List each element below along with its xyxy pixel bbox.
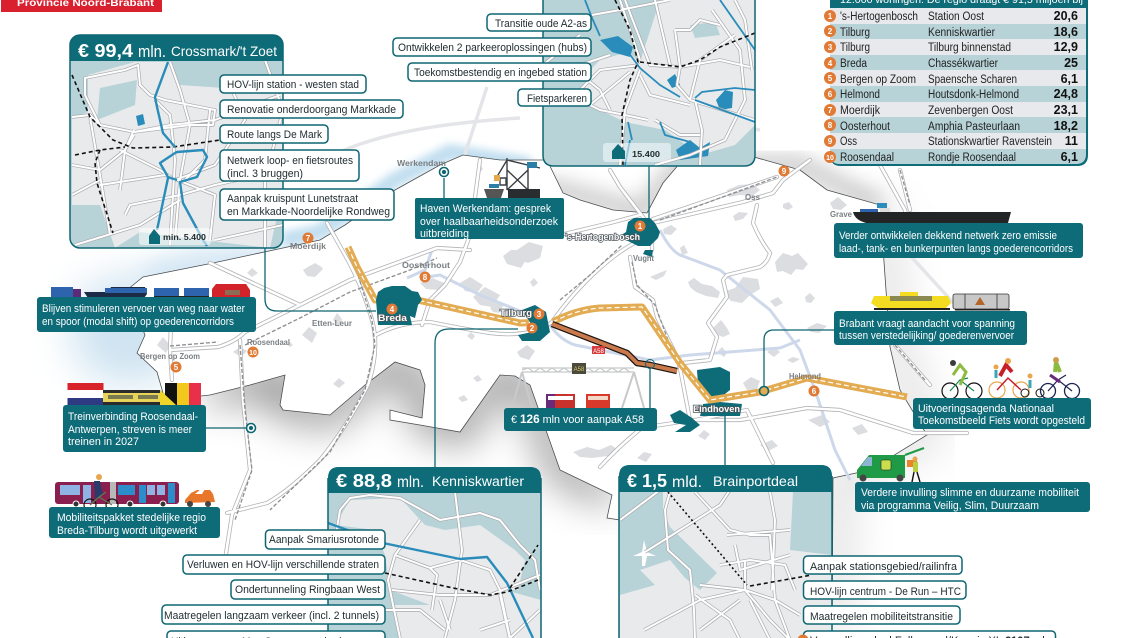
table: station investments: 12,9 bbox=[1054, 40, 1078, 54]
table: station investments: 1 bbox=[828, 12, 833, 21]
labels: Brainportdeal measures: Aanpak stationsgebied/railinfra bbox=[810, 561, 958, 573]
icon: locomotive and wagon bbox=[871, 292, 1010, 310]
callout: modal shift bbox=[37, 297, 256, 332]
callout: Mobiliteitspakket: Breda-Tilburg wordt uitgewerkt bbox=[57, 525, 197, 537]
place labels and numbered markers: Grave bbox=[830, 210, 853, 219]
place labels and numbered markers: Tilburg bbox=[500, 308, 532, 318]
place labels and numbered markers: Etten-Leur bbox=[312, 319, 352, 328]
labels: station measures bbox=[393, 14, 591, 106]
labels: Kenniskwartier measures: Aanpak Smariusrotonde bbox=[269, 534, 379, 546]
icon: house bbox=[149, 229, 160, 244]
table: station investments: 's-Hertogenbosch bbox=[840, 11, 918, 23]
callout: Haven Werkendam: Haven Werkendam: gesprek bbox=[420, 203, 551, 215]
place labels and numbered markers: Vught bbox=[633, 254, 654, 263]
table: station investments: Rondje Roosendaal bbox=[928, 152, 1016, 164]
table: station investments: Oss bbox=[840, 136, 857, 148]
place labels and numbered markers: 3 bbox=[537, 310, 542, 319]
table: station investments: Amphia Pasteurlaan bbox=[928, 121, 1020, 133]
place labels and numbered markers: 10 bbox=[249, 350, 257, 357]
panel header bbox=[328, 467, 541, 493]
panel: Crossmark 't Zoet bbox=[70, 35, 283, 248]
labels: Crossmark measures bbox=[220, 75, 403, 220]
panel: Brainportdeal: € 1,5 bbox=[627, 471, 667, 491]
place labels and numbered markers: 9 bbox=[782, 167, 787, 176]
table: station investments: 8 bbox=[828, 121, 833, 130]
labels: Crossmark measures: Renovatie onderdoorgang Markkade bbox=[227, 104, 396, 116]
callout: verstedelijking: Brabant vraagt aandacht voor spanning bbox=[839, 318, 1015, 330]
place labels and numbered markers: Bergen op Zoom bbox=[140, 352, 200, 361]
icon: house bbox=[612, 144, 625, 159]
panel: Crossmark 't Zoet: mln. bbox=[138, 42, 166, 61]
labels: Kenniskwartier measures: Maatregelen langzaam verkeer (incl. 2 tunnels) bbox=[164, 610, 379, 622]
map: towns bbox=[157, 163, 868, 462]
callout: Mobiliteitspakket bbox=[49, 507, 220, 538]
callout: zero emissie bbox=[834, 223, 1083, 258]
place labels and numbered markers: Oss bbox=[745, 193, 761, 202]
panel: Crossmark 't Zoet: min. 5.400 bbox=[163, 233, 207, 242]
table: station investments: 24,8 bbox=[1054, 87, 1078, 101]
labels: Kenniskwartier measures bbox=[162, 530, 385, 638]
table: station investments: 6,1 bbox=[1061, 150, 1078, 164]
table: station investments: Tilburg bbox=[840, 42, 870, 54]
place labels and numbered markers: Eindhoven bbox=[693, 404, 740, 414]
panel: Kenniskwartier bbox=[328, 467, 541, 638]
panel header bbox=[70, 35, 283, 61]
table: station investments: Stationskwartier Ravenstein bbox=[928, 136, 1052, 148]
table: station investments bbox=[824, 0, 1088, 166]
place labels and numbered markers bbox=[140, 159, 853, 414]
table: station investments: 10 bbox=[826, 155, 834, 162]
labels: station measures: Ontwikkelen 2 parkeeroplossingen (hubs) bbox=[398, 42, 587, 54]
table: station investments: 11 bbox=[1065, 134, 1078, 148]
labels: Crossmark measures: Route langs De Mark bbox=[227, 129, 322, 141]
table: station investments: Houtsdonk-Helmond bbox=[928, 89, 1019, 101]
table: station investments: 9 bbox=[828, 137, 833, 146]
icon: flags and train bbox=[68, 383, 201, 406]
place labels and numbered markers: 4 bbox=[390, 305, 395, 314]
callout: Haven Werkendam: over haalbaarheidsonderzoek bbox=[420, 216, 558, 228]
callout: modal shift: Blijven stimuleren vervoer van weg naar water bbox=[42, 303, 245, 315]
table: station investments: Helmond bbox=[840, 89, 880, 101]
icons: truck, barge, freight train bbox=[51, 284, 250, 298]
callout: zero emissie: Verder ontwikkelen dekkend netwerk zero emissie bbox=[839, 230, 1057, 242]
panel: Kenniskwartier: € 88,8 bbox=[336, 471, 392, 491]
icon: green van bbox=[857, 448, 924, 482]
labels: Crossmark measures: Aanpak kruispunt Lunetstraat bbox=[227, 193, 358, 205]
map: teal city shapes bbox=[376, 218, 742, 432]
panel: Brainportdeal: mld. bbox=[672, 474, 702, 491]
panel: 's-Hertogenbosch station map bbox=[543, 0, 755, 166]
labels: Kenniskwartier measures: Ondertunneling Ringbaan West bbox=[235, 584, 380, 596]
table: station investments: 20,6 bbox=[1054, 9, 1078, 23]
callout: zero emissie: laad-, tank- en bunkerpunten langs goederencorridors bbox=[839, 243, 1073, 255]
panel: Crossmark 't Zoet: Crossmark/'t Zoet bbox=[171, 43, 277, 59]
place labels and numbered markers: 2 bbox=[530, 324, 535, 333]
table: station investments: 2 bbox=[828, 27, 833, 36]
callout: Roosendaal-Antwerpen train: Treinverbinding Roosendaal- bbox=[68, 411, 198, 423]
table: station investments: 7 bbox=[828, 106, 833, 115]
panel: Brainportdeal bbox=[619, 465, 832, 638]
place labels and numbered markers: 7 bbox=[306, 234, 311, 243]
table: station investments: 18,6 bbox=[1054, 25, 1078, 39]
map: province shape bbox=[127, 155, 927, 638]
place labels and numbered markers: Oosterhout bbox=[402, 261, 450, 270]
callout: verstedelijking: tussen verstedelijking/ goederenvervoer bbox=[839, 330, 1014, 342]
place labels and numbered markers: 6 bbox=[812, 387, 817, 396]
callout: Nationaal Toekomstbeeld Fiets: Toekomstbeeld Fiets wordt opgesteld bbox=[918, 415, 1085, 427]
map label: red province tag bbox=[1, 0, 162, 12]
table: station investments: 5 bbox=[828, 74, 833, 83]
callout: Mobiliteitspakket: Mobiliteitspakket stedelijke regio bbox=[57, 512, 206, 524]
labels: Crossmark measures: en Markkade-Noordelijke Rondweg bbox=[227, 206, 390, 218]
place labels and numbered markers: Werkendam bbox=[397, 159, 446, 168]
table: station investments: 4 bbox=[828, 59, 833, 68]
table: station investments: Kenniskwartier bbox=[928, 27, 995, 39]
callout: Haven Werkendam bbox=[415, 198, 564, 240]
place labels and numbered markers: Breda bbox=[378, 313, 408, 323]
map: A58 motorway highlight: A58 bbox=[593, 349, 604, 355]
callout: modal shift: en spoor (modal shift) op goederencorridors bbox=[42, 316, 234, 328]
place labels and numbered markers: 8 bbox=[423, 273, 428, 282]
map: highlighted cycle corridor west bbox=[348, 247, 543, 323]
table: station investments: 23,1 bbox=[1054, 103, 1078, 117]
table: station investments: 3 bbox=[828, 43, 833, 52]
table: station investments: Zevenbergen Oost bbox=[928, 105, 1014, 117]
callout: Roosendaal-Antwerpen train bbox=[63, 405, 206, 452]
place labels and numbered markers: 1 bbox=[638, 222, 643, 231]
table: station investments: Roosendaal bbox=[840, 152, 894, 164]
labels: Crossmark measures: Netwerk loop- en fietsroutes bbox=[227, 155, 353, 167]
table: station investments: 25 bbox=[1064, 56, 1078, 70]
place labels and numbered markers: 's-Hertogenbosch bbox=[565, 232, 640, 242]
icon: inland ship bbox=[853, 203, 1011, 223]
table: station investments: Bergen op Zoom bbox=[840, 74, 916, 86]
table: station investments: Station Oost bbox=[928, 11, 985, 23]
labels: station measures: Transitie oude A2-as bbox=[495, 18, 587, 30]
table: station investments: Tilburg binnenstad bbox=[928, 42, 1011, 54]
table: station investments: Chassékwartier bbox=[928, 58, 998, 70]
icon: A58 gantry and buses: A58 bbox=[574, 367, 585, 373]
table: station investments: Oosterhout bbox=[840, 121, 891, 133]
panel: Kenniskwartier: mln. bbox=[397, 474, 424, 491]
place labels and numbered markers: Helmond bbox=[789, 372, 821, 381]
callout: A58: € 126 mln voor aanpak A58 bbox=[511, 412, 644, 426]
panel: Crossmark 't Zoet: € 99,4 bbox=[78, 41, 133, 61]
table: station investments: Moerdijk bbox=[840, 105, 880, 117]
callout: Nationaal Toekomstbeeld Fiets bbox=[913, 398, 1091, 429]
connector lines bbox=[206, 166, 834, 468]
callout: Roosendaal-Antwerpen train: treinen in 2027 bbox=[68, 436, 139, 448]
map: rivers and canals bbox=[407, 230, 850, 480]
icon: cyclists bbox=[942, 357, 1080, 399]
callout: A58 bbox=[504, 408, 657, 431]
labels: Brainportdeal measures: HOV-lijn centrum - De Run – HTC bbox=[810, 586, 961, 598]
callout: Veilig, Slim, Duurzaam bbox=[855, 482, 1090, 512]
panel: 's-Hertogenbosch station map: 15.400 bbox=[632, 150, 661, 159]
labels: Kenniskwartier measures: Verluwen en HOV-lijn verschillende straten bbox=[187, 559, 379, 571]
callout: Roosendaal-Antwerpen train: Antwerpen, streven is meer bbox=[68, 424, 192, 436]
icons: bus, cyclist, car bbox=[55, 474, 215, 511]
panel header bbox=[619, 465, 832, 492]
map: A58 motorway highlight bbox=[552, 324, 677, 371]
callout: Veilig, Slim, Duurzaam: Verdere invulling slimme en duurzame mobiliteit bbox=[861, 487, 1079, 499]
labels: Brainportdeal measures: Maatregelen mobiliteitstransitie bbox=[810, 611, 953, 623]
table: station investments: Breda bbox=[840, 58, 868, 70]
panel: Kenniskwartier: Kenniskwartier bbox=[432, 473, 524, 489]
labels: Crossmark measures: HOV-lijn station - westen stad bbox=[227, 79, 359, 91]
icon: A58 gantry and buses bbox=[512, 363, 644, 408]
place labels and numbered markers: Roosendaal bbox=[247, 338, 290, 347]
table: station investments: Spaensche Scharen bbox=[928, 74, 1017, 86]
callout: verstedelijking bbox=[834, 311, 1027, 345]
map: road and rail network bbox=[170, 160, 967, 560]
callout: Veilig, Slim, Duurzaam: via programma Veilig, Slim, Duurzaam bbox=[861, 500, 1039, 512]
place labels and numbered markers: 5 bbox=[174, 363, 179, 372]
callout: Nationaal Toekomstbeeld Fiets: Uitvoeringsagenda Nationaal bbox=[918, 403, 1054, 415]
labels: Brainportdeal measures bbox=[798, 556, 1056, 638]
labels: station measures: Toekomstbestendig en ingebed station bbox=[414, 67, 587, 79]
icon: airplane bbox=[633, 540, 656, 566]
map: highlighted cycle corridor east bbox=[553, 307, 907, 400]
place labels and numbered markers: Moerdijk bbox=[290, 242, 327, 251]
table: station investments: 6 bbox=[828, 90, 833, 99]
labels: station measures: Fietsparkeren bbox=[527, 93, 587, 105]
callout: Haven Werkendam: uitbreiding bbox=[420, 228, 469, 240]
table: station investments: Tilburg bbox=[840, 27, 870, 39]
icon: crane and barge at Werkendam bbox=[484, 158, 540, 198]
labels: Crossmark measures: (incl. 3 bruggen) bbox=[227, 168, 303, 180]
table: station investments: 6,1 bbox=[1061, 72, 1078, 86]
table: station investments: 18,2 bbox=[1054, 119, 1078, 133]
panel: Brainportdeal: Brainportdeal bbox=[713, 473, 798, 489]
